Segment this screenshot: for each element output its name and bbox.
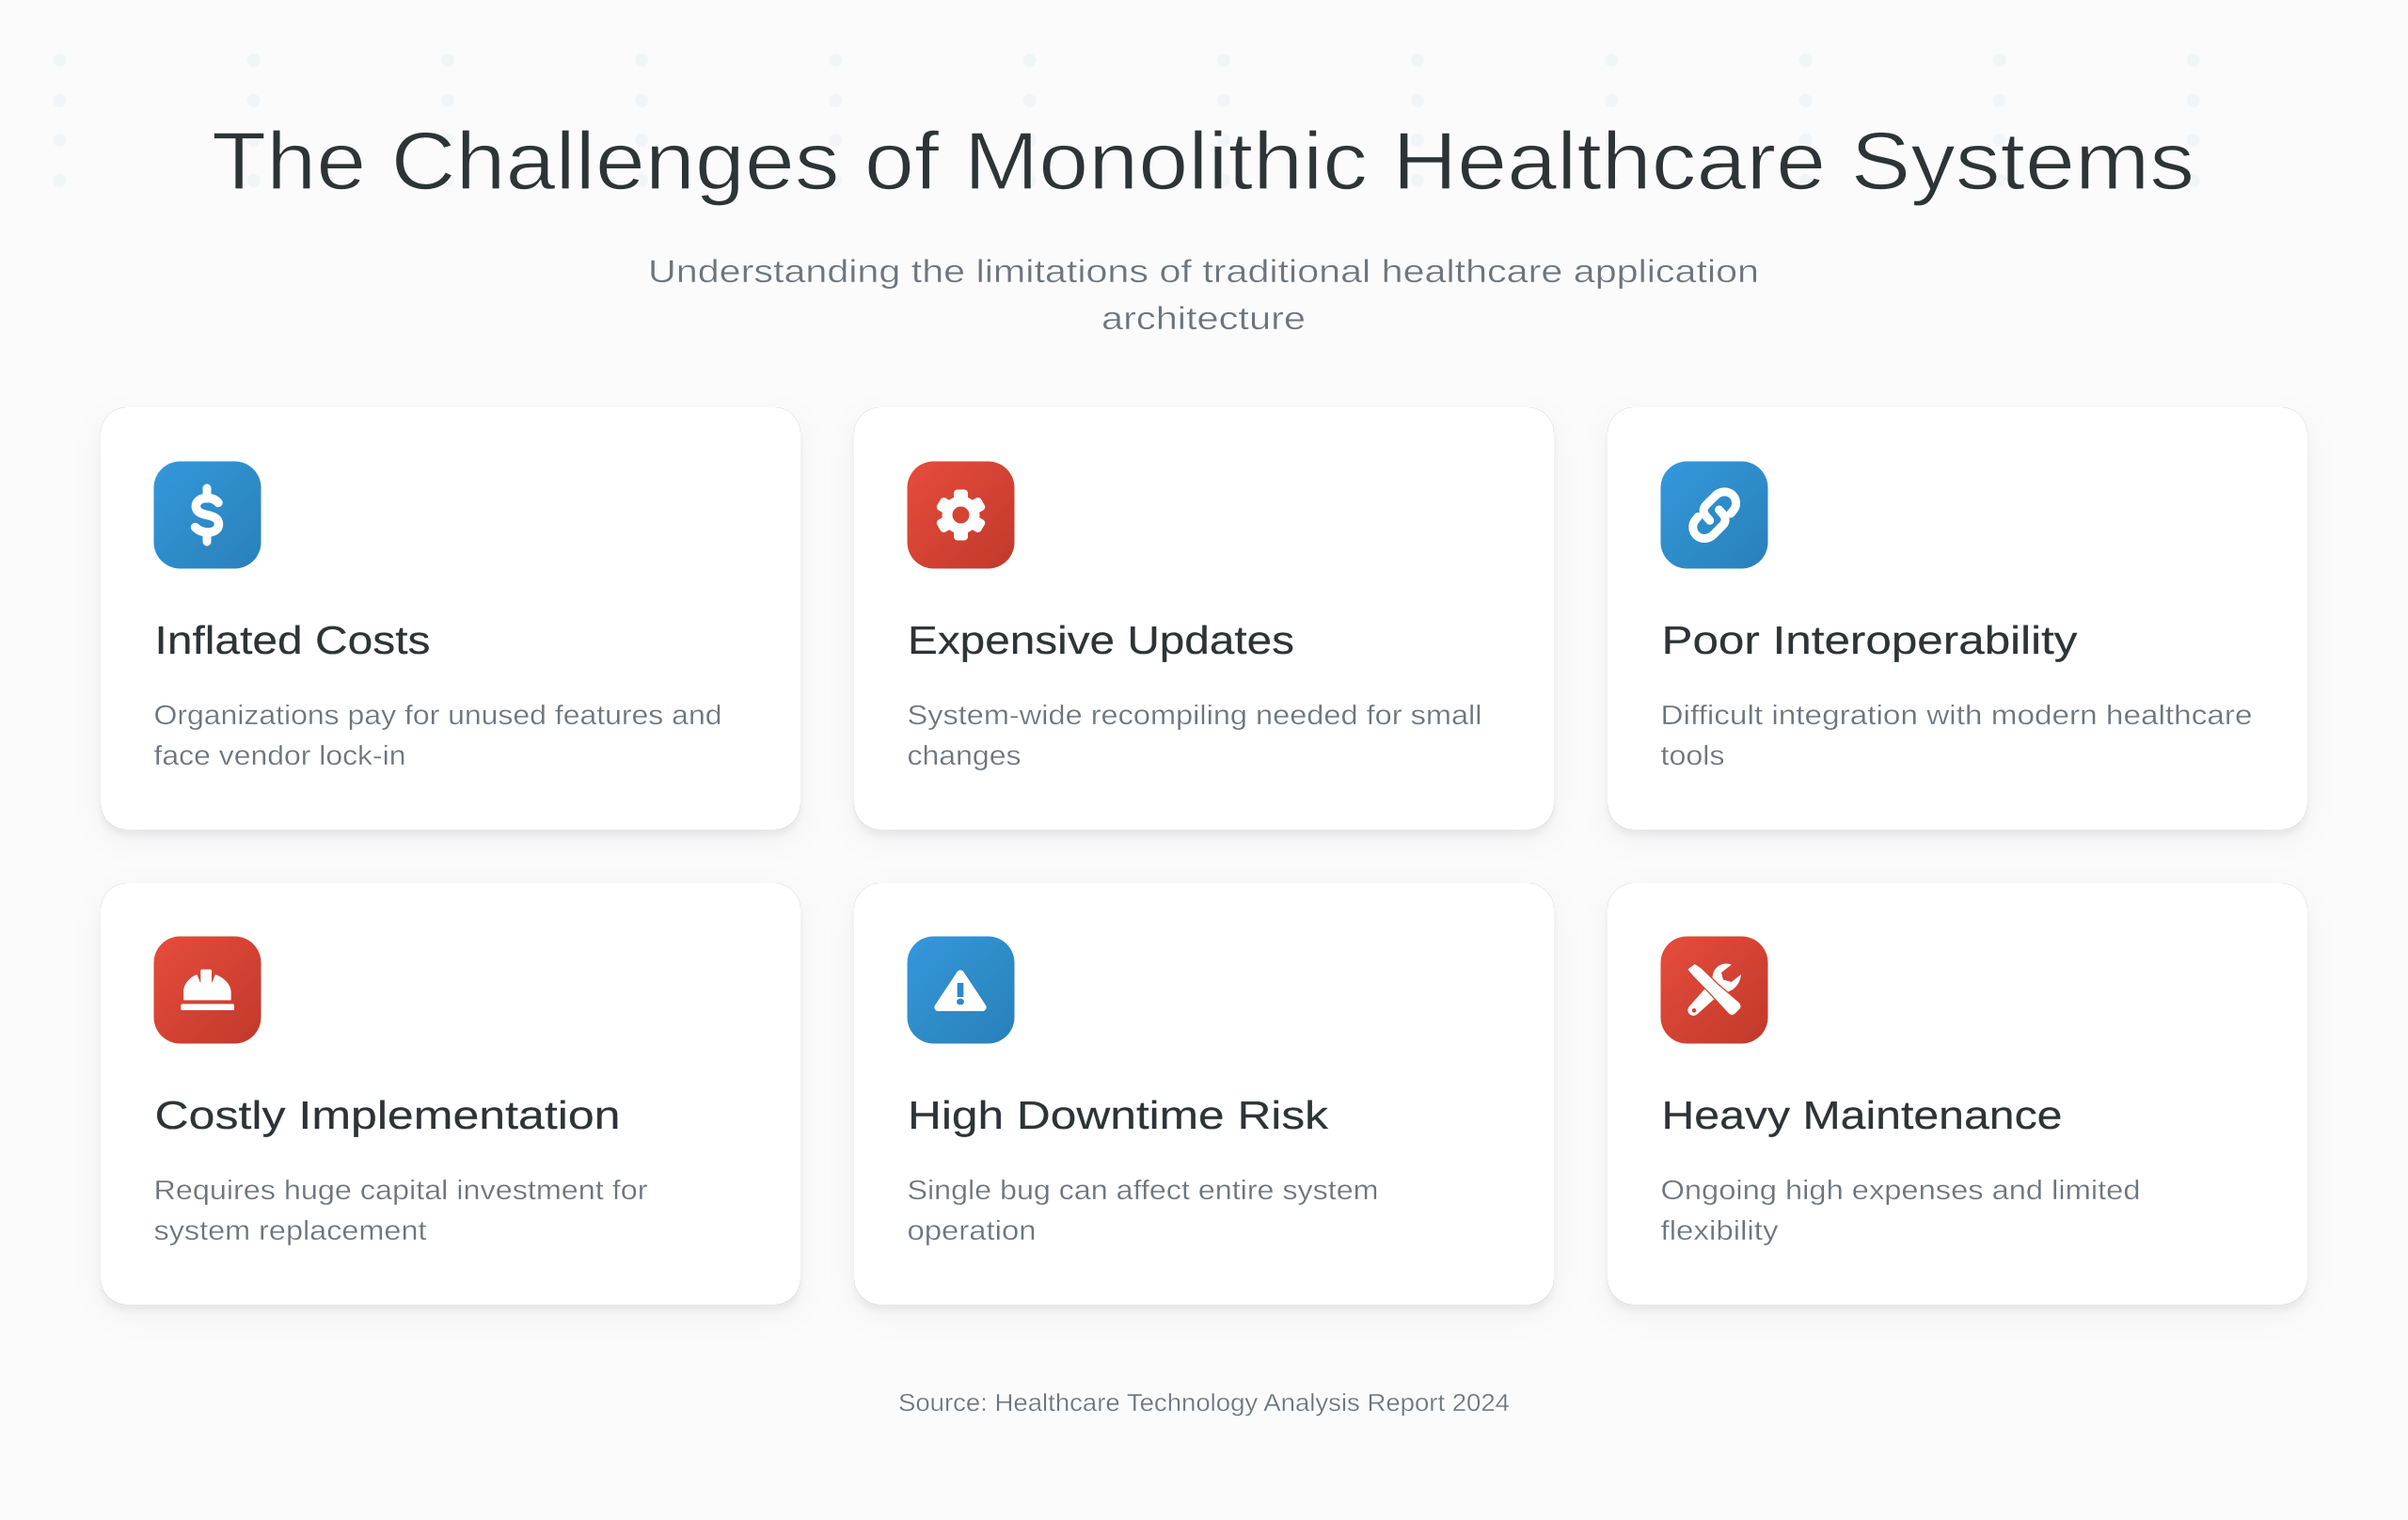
icon: warning triangle — [907, 937, 1014, 1044]
source note: Source: Healthcare Technology Analysis Report 2024 — [898, 1388, 1510, 1417]
description: flexibility — [1661, 1216, 1779, 1246]
subtitle: architecture — [1101, 301, 1306, 337]
heading: Inflated Costs — [154, 618, 431, 662]
panel: Heavy Maintenance — [1608, 883, 2307, 1305]
card background — [854, 407, 1554, 830]
panel: High Downtime Risk — [854, 883, 1554, 1305]
icon: crossed tools — [1661, 937, 1768, 1044]
description: operation — [907, 1216, 1037, 1246]
icon: hard hat — [154, 937, 261, 1044]
icon: gear — [907, 461, 1014, 568]
card background — [854, 883, 1554, 1305]
description: Requires huge capital investment for — [154, 1176, 648, 1206]
card background — [101, 407, 800, 830]
description: system replacement — [154, 1216, 427, 1246]
panel: Inflated Costs — [101, 407, 800, 830]
heading: Poor Interoperability — [1661, 618, 2077, 662]
heading: Heavy Maintenance — [1661, 1093, 2062, 1137]
heading: High Downtime Risk — [908, 1093, 1329, 1137]
subtitle: Understanding the limitations of traditional healthcare application — [648, 254, 1759, 290]
heading: Expensive Updates — [908, 618, 1294, 662]
card background — [101, 883, 800, 1305]
description: Difficult integration with modern healthcare — [1661, 701, 2252, 731]
card background — [1608, 407, 2307, 830]
description: changes — [907, 741, 1022, 771]
description: System-wide recompiling needed for small — [907, 701, 1482, 731]
description: Ongoing high expenses and limited — [1661, 1176, 2141, 1206]
icon: dollar sign — [154, 461, 261, 568]
icon: chain link — [1661, 461, 1768, 568]
description: Organizations pay for unused features and — [154, 701, 722, 731]
panel: Expensive Updates — [854, 407, 1554, 830]
heading: Costly Implementation — [154, 1093, 621, 1137]
title: The Challenges of Monolithic Healthcare Systems — [212, 116, 2194, 207]
panel: Costly Implementation — [101, 883, 800, 1305]
panel: Poor Interoperability — [1608, 407, 2307, 830]
description: tools — [1661, 741, 1725, 771]
description: Single bug can affect entire system — [907, 1176, 1379, 1206]
description: face vendor lock-in — [154, 741, 406, 771]
card background — [1608, 883, 2307, 1305]
